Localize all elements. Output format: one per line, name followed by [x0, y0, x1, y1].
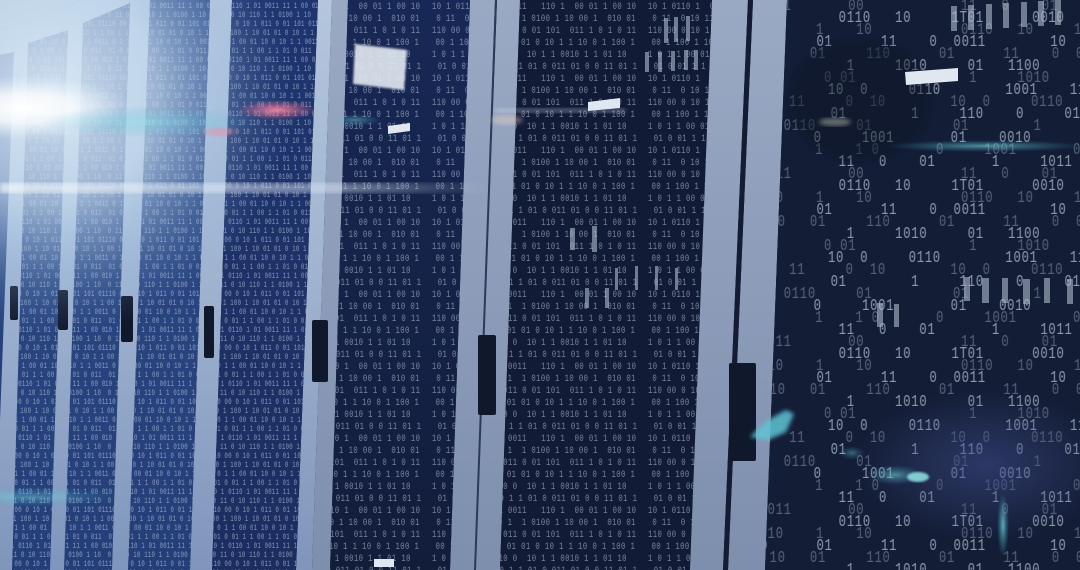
panel: rack door 3: [128, 0, 210, 570]
door handles: [10, 286, 756, 461]
panel: right rack door with large binary digits: [765, 0, 1080, 570]
panel: far-left rack doors: [0, 3, 130, 570]
ceiling corner: [0, 0, 82, 30]
panel: rack door 5: [330, 0, 470, 570]
panel: rack door 4: [212, 0, 318, 570]
rack door frames: [0, 0, 787, 570]
panel: rack door 6: [500, 0, 712, 570]
light reflections on glass: [353, 0, 1073, 567]
